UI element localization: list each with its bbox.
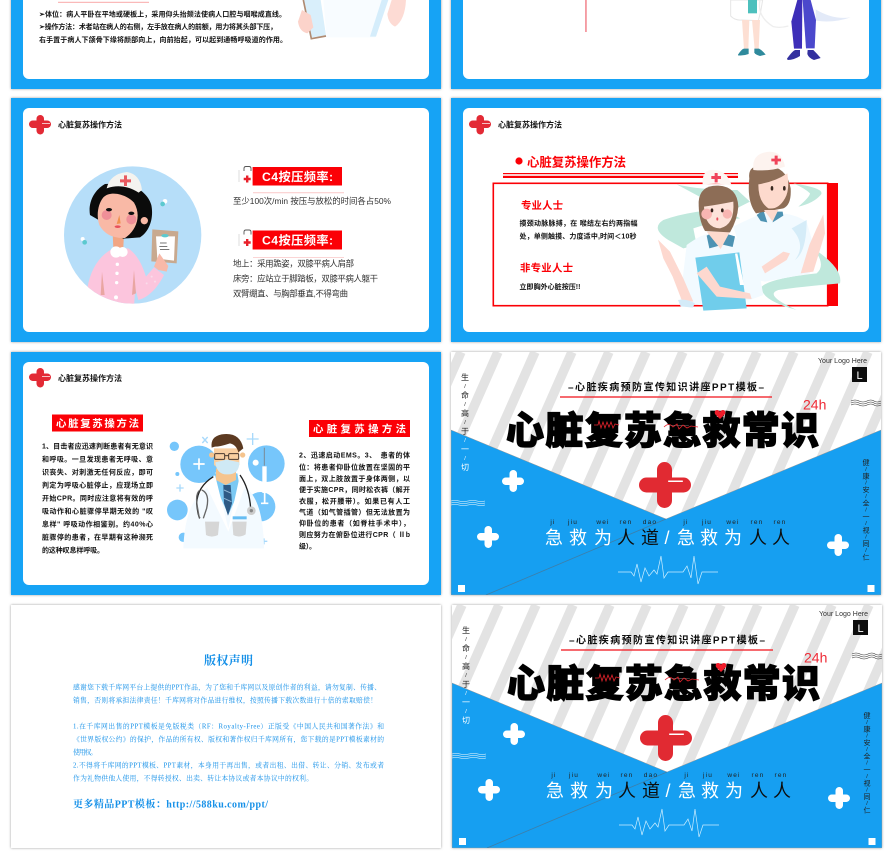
slogan line: 道 [642,781,660,801]
right vertical slogan: / [865,480,867,486]
panel: partial slide top right [451,0,881,89]
heading underline [58,2,149,3]
left vertical slogan: / [464,456,466,462]
pinyin row: jiu [567,519,578,526]
copyright body: 使用权。 [73,748,97,756]
left vertical slogan: 一 [462,698,470,707]
text: professional: 摸颈动脉脉搏，在 喉结左右约两指幅 [520,218,638,227]
right vertical slogan: 全 [862,498,870,508]
text block: body position and procedure: 右手置于病人下颌骨下缘将颜部向上，向前抬起，可以起到通畅呼吸道的作用。 [39,35,287,44]
icon: red cross logo [29,368,51,388]
pinyin row: ji [682,519,689,526]
panel: CPR frequency slide [11,98,441,342]
decorative red rule [585,0,587,32]
copyright heading: 版权声明 [204,652,253,668]
right vertical slogan: 康 [864,724,870,734]
text: position instructions: 床旁：应站立于脚踏板，双膝平病人躯干 [233,274,378,284]
pinyin row: ji [550,772,557,779]
text block: step two: 气道（如气管插管）但无法放置为 [299,508,410,516]
pinyin row: wei [725,519,740,526]
right vertical slogan: 同 [862,540,870,548]
panel: professional and non-professional slide [451,98,881,342]
text: non-professional: 立即胸外心脏按压!! [520,282,580,291]
slogan line: 救 [569,528,587,548]
panel: CPR steps with doctor [11,352,441,595]
copyright body: 作为礼物供他人使用，不得转授权、出卖、转让本协议或者本协议中的权利。 [73,774,313,784]
pinyin row: dao [643,519,657,526]
text block: step two: 2、迅速启动EMS。3、 患者的体 [299,450,410,460]
illustration: doctor holding clipboard, cropped [298,0,406,39]
slogan line [545,528,790,548]
right vertical slogan: / [865,534,867,540]
heart [716,663,726,672]
slogan line: 人 [772,528,790,548]
text block: step one [42,442,153,554]
pinyin row: ji [549,519,556,526]
pinyin row: ren [774,772,788,779]
slogan line: / [664,528,670,548]
slogan line: 急 [545,528,563,548]
text block: step two: 面上，双上肢放置于身体两侧，以 [299,474,410,483]
white corner squares [458,585,874,592]
pinyin row: ren [620,519,632,526]
left vertical slogan [461,372,469,472]
slogan line: 为 [725,781,743,801]
24h label: 24h [803,396,826,412]
text block: step one: 的这种叹息样呼吸。 [42,546,104,554]
illustration: doctor with mask [167,433,285,548]
copyright body: 1.在千库网出售的PPT模板是免版税类（RF：Royalty-Free）正版受《中国人民共和国著作法》和 [73,722,384,730]
right vertical slogan: / [865,508,867,514]
logo mark: L [856,370,863,382]
slide heading: 心脏复苏操作方法 [58,120,122,130]
right vertical slogan: / [865,548,867,554]
squiggle left [451,500,485,506]
slogan line: 道 [641,528,659,548]
slogan line: 急 [678,781,696,801]
left vertical slogan: / [465,709,467,715]
text: professional: 处，单侧触摸、力度适中,时间＜10秒 [520,231,636,240]
left vertical slogan: / [464,420,466,426]
left vertical slogan: 切 [461,463,469,472]
illustration: nurse in blue circle [64,166,201,307]
red outlined content box [493,183,838,306]
slogan line: 急 [677,528,695,548]
main title: 心脏复苏急救常识 [507,664,820,706]
left vertical slogan [462,625,470,725]
24h label: 24h [804,650,827,666]
text: professional [520,199,638,240]
logo mark: L [857,623,864,635]
text: position instructions: 双臂绷直、与胸部垂直,不得弯曲 [233,288,348,298]
left vertical slogan: 于 [462,680,470,689]
left vertical slogan: 命 [462,643,470,653]
text block: body position and procedure: ➢体位：病人平卧在平地或硬板上，采用仰头抬颏法使病人口腔与咽喉成直线。 [39,10,286,18]
slogan line: 人 [773,781,791,801]
callout: frequency heading one: C4按压频率: [262,169,333,184]
slogan line: 人 [618,781,636,801]
icon: red cross logo [469,115,491,134]
red ecg on title [594,421,698,429]
text block: step two [299,450,410,550]
left vertical slogan: / [465,673,467,679]
copyright body [73,682,384,784]
text: non-professional [520,262,580,291]
divider two [253,257,344,258]
text block: step two: 衣服，松开腰带）。如果已有人工 [299,496,410,506]
right vertical slogan: 视 [862,526,870,534]
right vertical slogan: / [866,774,868,780]
squiggle right [851,400,881,406]
right vertical slogan: 全 [864,752,870,760]
white ecg line [619,809,719,837]
subtitle: –心脏疾病预防宣传知识讲座PPT模板– [569,634,765,646]
text block: body position and procedure [39,10,287,44]
right vertical slogan: 同 [864,793,870,801]
copyright body: 《世界版权公约》的保护，作品的所有权、版权和著作权归千库网所有，您下载的是PPT模板素材的 [73,734,384,744]
pinyin row: ren [620,772,634,779]
slide heading: 心脏复苏操作方法 [58,373,122,383]
slogan line: 急 [546,781,564,801]
pinyin row: ren [750,519,764,526]
section title with dot: 心脏复苏操作方法 [527,154,626,170]
logo mark [852,367,867,382]
slogan line: 人 [749,528,767,548]
more templates link: 更多精品PPT模板：http://588ku.com/ppt/ [73,798,268,810]
text: professional: 专业人士 [521,199,563,212]
text block: body position and procedure: ➢操作方法：术者站在病人的右侧，左手放在病人的前额，用力将其头部下压， [39,22,277,31]
right vertical slogan: / [866,801,868,807]
right vertical slogan: 视 [864,778,870,788]
left vertical slogan: / [464,438,466,444]
divider one [253,192,344,193]
logo text: Your Logo Here [819,611,868,618]
left vertical slogan: / [465,691,467,697]
right vertical slogan: 仁 [864,806,870,814]
subtitle: –心脏疾病预防宣传知识讲座PPT模板– [568,380,764,394]
slogan line [546,781,791,801]
text block: step two: 级）。 [299,542,316,550]
panel: partial slide top left [11,0,441,89]
panel: cover slide upper [450,350,882,596]
text: position instructions [233,258,378,298]
panel: cover slide lower [450,604,884,850]
text block: step one: 1、目击者应迅速判断患者有无意识 [42,442,153,450]
text block: step one: 和呼吸。一旦发现患者无呼吸、意 [42,454,153,464]
text block: step two: 仰卧位的患者（如脊柱手术中）， [299,518,410,528]
white corner squares [459,838,876,845]
right vertical slogan: 健 [862,458,870,467]
slogan line: 救 [570,781,588,801]
slogan line: 人 [750,781,768,801]
text block: step two: 则应努力在俯卧位进行CPR（ Ⅱb [299,530,410,539]
slogan line: 人 [617,528,635,548]
callout: frequency heading two [238,230,342,250]
slogan line: 为 [595,781,613,801]
red ecg on title [595,674,699,682]
left vertical slogan: 生 [461,372,469,382]
squiggle left [452,754,486,758]
main title: 心脏复苏急救常识 [506,411,819,453]
pinyin row: dao [644,772,658,779]
pinyin row: jiu [702,772,713,779]
subtitle rule [561,649,773,651]
pinyin row: jiu [568,772,579,779]
right vertical slogan [862,458,870,562]
text block: step two: 位：将患者仰卧位放置在坚固的平 [299,462,410,472]
label: right step heading [309,420,410,437]
slogan line: 为 [724,528,742,548]
right vertical slogan: / [865,494,867,500]
right vertical slogan: 安 [862,485,870,494]
label: right step heading: 心脏复苏操方法 [313,422,406,436]
copyright body: 销售，否则将承担法律责任！千库网将对作品进行维权，按照传播下载次数进行十倍的索取赔偿！ [73,696,377,706]
right vertical slogan: 健 [864,711,870,720]
right vertical slogan: 一 [862,514,870,521]
left vertical slogan: 一 [461,445,469,454]
left vertical slogan: / [464,384,466,390]
right vertical slogan [864,711,870,814]
right vertical slogan: 一 [864,767,870,774]
text block: step one: 判定为呼吸心脏停止，应现场立即 [42,480,153,490]
left vertical slogan: 高 [462,661,470,671]
callout: frequency heading two: C4按压频率: [262,232,333,248]
text block: step one: 脏骤停的患者，在早期有这种濒死 [42,532,153,542]
right vertical slogan: / [866,747,868,753]
left vertical slogan: 于 [461,427,469,436]
squiggle right [852,653,882,659]
right vertical slogan: / [866,788,868,794]
pinyin row: ren [752,772,764,779]
white crosses [477,470,849,556]
panel: copyright statement [11,605,441,848]
text: non-professional: 非专业人士 [520,262,573,274]
right vertical slogan: / [865,521,867,527]
pinyin row: jiu [701,519,712,526]
pinyin row: wei [596,772,611,779]
slogan line: 为 [594,528,612,548]
pinyin row: wei [726,772,741,779]
copyright body: 感谢您下载千库网平台上提供的PPT作品，为了您和千库网以及原创作者的利益，请勿复制、传播、 [73,682,381,692]
text block: step two: 便于实施CPR，同时松衣裤（解开 [299,485,410,494]
pinyin row [549,519,786,526]
text block: step one: 开始CPR。同时应注意将有效的呼 [42,494,153,502]
left vertical slogan: / [465,655,467,661]
left vertical slogan: / [465,637,467,643]
logo mark [853,620,868,635]
callout: frequency heading one [238,166,342,186]
label: left step heading: 心脏复苏操方法 [56,417,139,430]
right vertical slogan: / [866,734,868,740]
pinyin row: ji [683,772,690,779]
icon: red cross logo [29,115,51,134]
slogan line: 救 [701,781,719,801]
subtitle rule [560,396,772,398]
right vertical slogan: 康 [862,472,870,480]
text: compression rate: 至少100次/min 按压与放松的时间各占50% [233,196,392,206]
left vertical slogan: 切 [462,716,470,725]
text block: step one: 识丧失、对刺激无任何反应，即可 [42,468,153,476]
section title with dot [503,154,738,178]
right vertical slogan: 安 [864,738,870,747]
right vertical slogan: / [866,720,868,726]
logo text: Your Logo Here [818,358,867,365]
heart [715,410,725,419]
pinyin row: ren [774,519,786,526]
copyright body: 2.不得将千库网的PPT模板、PPT素材，本身用于再出售，或者出租、出借、转让、分销、发布或者 [73,760,384,770]
left vertical slogan: / [464,402,466,408]
right vertical slogan: 仁 [862,552,870,562]
text block: step one: 吸动作和心脏骤停早期无效的 "叹 [42,506,153,516]
text: position instructions: 地上：采用跪姿，双膝平病人肩部 [233,258,354,268]
red cross emblem [640,715,692,761]
slogan line: 救 [700,528,718,548]
right vertical slogan: / [865,467,867,473]
label: left step heading [52,414,143,432]
white ecg line [618,556,718,584]
illustration: doctors' legs [731,0,851,60]
left vertical slogan: 生 [462,625,470,635]
slide heading: 心脏复苏操作方法 [498,120,562,130]
text block: step one: 息样" 呼吸动作相鉴别。约40%心 [42,520,153,528]
slogan line: / [665,781,671,801]
white crosses [478,723,850,809]
illustration: two nurses [658,152,840,311]
right vertical slogan: / [866,760,868,766]
red cross emblem [639,462,691,508]
left vertical slogan: 高 [461,408,469,418]
left vertical slogan: 命 [461,390,469,400]
pinyin row: wei [595,519,610,526]
pinyin row [550,772,788,779]
